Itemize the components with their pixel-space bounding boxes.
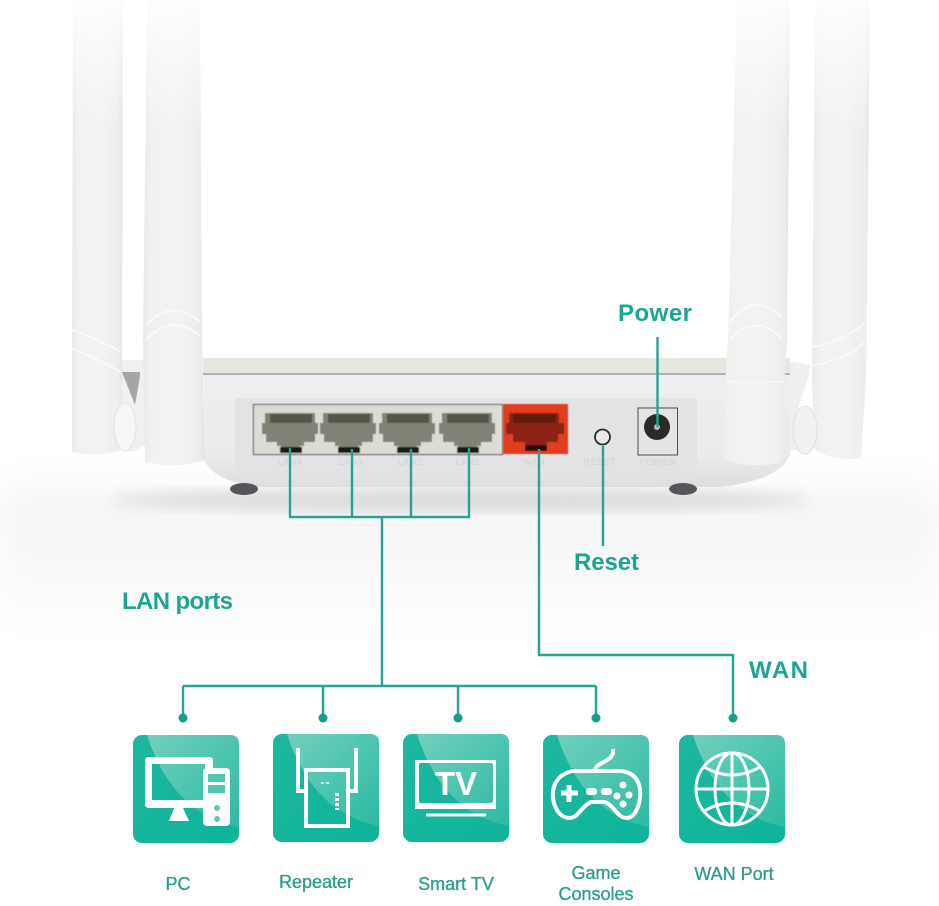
- connector dots: LAN devices: [178, 714, 600, 722]
- antenna: left rear: [72, 0, 123, 455]
- LAN port block: [254, 404, 502, 454]
- hinge: right: [783, 360, 817, 454]
- tile: Smart TV: [403, 734, 509, 842]
- power jack: [638, 408, 678, 455]
- icon: computer: [145, 757, 230, 826]
- antenna: right rear: [812, 0, 870, 459]
- connector lines: LAN: [183, 448, 596, 716]
- faint port labels: POWER: [640, 457, 676, 467]
- caption: WAN Port: WAN Port: [694, 864, 774, 884]
- caption: Game Consoles: [558, 863, 634, 904]
- faint port labels: [278, 457, 676, 467]
- router body: [203, 358, 790, 495]
- faint port labels: RESET: [584, 457, 616, 467]
- rear port recess: [235, 398, 697, 478]
- feet: [230, 483, 258, 495]
- connector line: WAN: [539, 449, 738, 722]
- caption: Game Consoles: Consoles: [558, 884, 634, 904]
- faint port labels: WAN: [523, 457, 545, 467]
- top fade on antennas: [60, 0, 880, 130]
- caption: Smart TV: Smart TV: [418, 874, 494, 894]
- label: WAN: WAN: [749, 657, 808, 684]
- tile: PC: [133, 735, 239, 843]
- connector line: Power: [656, 337, 659, 427]
- antenna: right front: [720, 0, 790, 465]
- tile: Repeater: [273, 734, 379, 842]
- floor shadow: [0, 470, 939, 640]
- icon: gamepad: [553, 749, 640, 818]
- faint port labels: LAN2: [398, 457, 422, 467]
- antenna: left front: [143, 0, 205, 466]
- reset button: [595, 430, 610, 444]
- caption: Game Consoles: Game: [571, 863, 621, 883]
- faint port labels: LAN3: [339, 457, 363, 467]
- icon: globe: [696, 753, 768, 825]
- label: LAN ports: LAN ports: [122, 588, 233, 615]
- label: Reset: Reset: [574, 549, 639, 576]
- caption: Repeater: Repeater: [279, 872, 353, 892]
- icon: TV: TV: [435, 765, 477, 802]
- icon: repeater: [298, 748, 356, 826]
- connector line: Reset: [602, 446, 604, 546]
- tile: WAN Port: [679, 735, 785, 843]
- faint port labels: LAN1: [456, 457, 480, 467]
- hinge: left: [114, 360, 145, 452]
- faint port labels: LAN4: [278, 457, 302, 467]
- tile: Game Consoles: [543, 735, 649, 843]
- label: Power: Power: [618, 300, 692, 327]
- WAN port block: [503, 404, 568, 454]
- caption: PC: PC: [165, 874, 191, 894]
